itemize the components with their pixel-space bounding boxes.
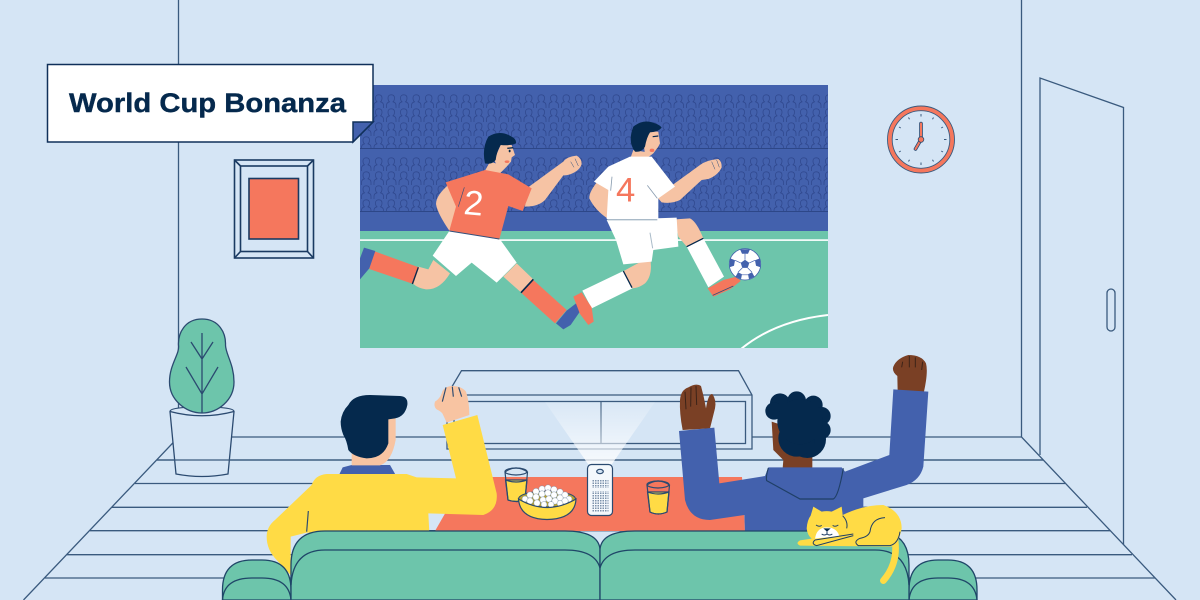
projector (588, 464, 612, 516)
raised hand (434, 386, 469, 423)
cat body (797, 505, 902, 547)
player number 4: 4 (616, 171, 635, 209)
left armrest (222, 560, 291, 600)
man in yellow sweater (267, 386, 497, 575)
cat outlines (813, 516, 900, 546)
man in blue hoodie (679, 355, 928, 533)
sleeping cat (797, 505, 902, 581)
cat nose (823, 528, 831, 532)
right cushion (600, 531, 909, 600)
pitch (360, 231, 828, 349)
title text: World Cup Bonanza (69, 88, 347, 118)
wall clock (888, 106, 954, 173)
bowl rim (518, 491, 576, 507)
cat muzzle (815, 527, 839, 539)
neck and face (772, 422, 812, 468)
TV console (447, 371, 752, 449)
popcorn (522, 485, 572, 508)
left cushion (291, 531, 600, 600)
left hand (680, 385, 715, 430)
stadium stands (360, 85, 828, 231)
glass of juice left (505, 468, 528, 502)
glass of juice right (647, 481, 670, 514)
framed picture (234, 160, 314, 258)
plant leaf (170, 319, 234, 413)
hood outline (766, 468, 843, 499)
player number 2 (360, 133, 583, 329)
right hand (893, 355, 927, 392)
door handle (1107, 289, 1115, 331)
door (1040, 78, 1124, 544)
sweater (267, 415, 497, 575)
coffee table (435, 477, 745, 531)
potted plant (170, 319, 234, 476)
curly hair (765, 391, 831, 458)
neck and ear (352, 417, 396, 465)
sofa (222, 531, 977, 600)
picture artwork (249, 178, 298, 239)
hoodie (679, 389, 928, 533)
projected screen (360, 85, 828, 349)
cat tail (883, 540, 896, 581)
projector light beam (545, 402, 655, 464)
player number 2: 2 (462, 184, 485, 224)
floor line under console (157, 459, 1043, 461)
football (729, 249, 761, 280)
player number 4 (573, 121, 741, 325)
collar (339, 465, 396, 475)
popcorn bowl (518, 485, 576, 520)
title banner (48, 64, 373, 142)
right armrest (909, 560, 977, 600)
banner fold (353, 122, 373, 142)
hair (341, 395, 407, 458)
